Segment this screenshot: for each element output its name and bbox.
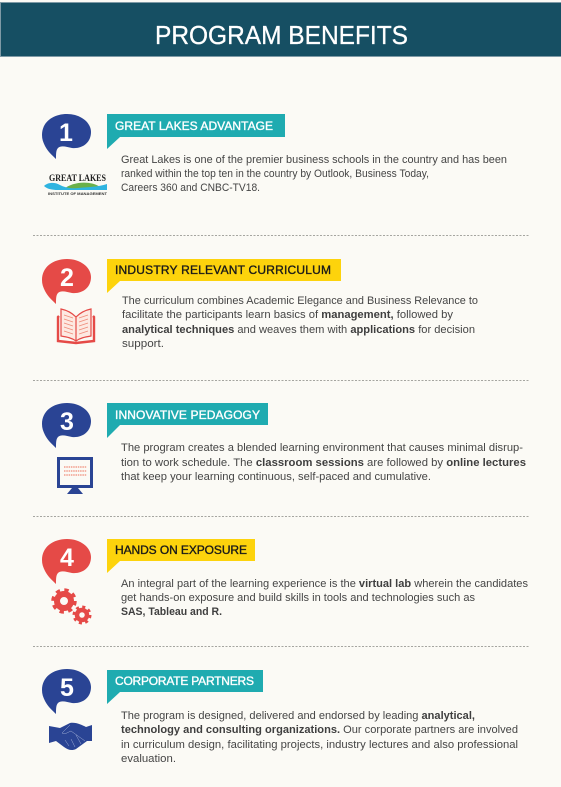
- icon: great lakes logo: GREAT LAKES: [49, 173, 106, 183]
- number bubble 3: [42, 403, 91, 448]
- icon: monitor: [58, 458, 92, 494]
- text block: SAS, Tableau and R.: [121, 606, 222, 618]
- text block: [121, 442, 526, 483]
- heading banner: [107, 403, 268, 438]
- title: PROGRAM BENEFITS: [155, 20, 408, 50]
- text block: facilitate the participants learn basics of management, followed by: [122, 309, 454, 321]
- heading banner: [107, 114, 285, 149]
- heading banner: [107, 539, 255, 573]
- text block: evaluation.: [121, 753, 176, 765]
- number bubble 5: 5: [60, 674, 74, 702]
- text block: in curriculum design, facilitating projects, industry lectures and also professional: [121, 739, 518, 751]
- number bubble 1: 1: [59, 119, 73, 147]
- header band: [0, 2, 561, 57]
- text block: [121, 578, 529, 618]
- text block: An integral part of the learning experience is the virtual lab wherein the candidates: [121, 578, 529, 590]
- text block: analytical techniques and weaves them with applications for decision: [122, 324, 475, 336]
- number bubble 3: 3: [60, 408, 74, 436]
- panel: great lakes advantage: [42, 114, 507, 196]
- heading banner: HANDS ON EXPOSURE: [115, 543, 247, 557]
- number bubble 5: [42, 669, 91, 714]
- icon: open book: [58, 309, 94, 343]
- text block: technology and consulting organizations. Our corporate partners are involved: [121, 724, 518, 736]
- number bubble 2: [42, 259, 91, 304]
- icon: handshake: [49, 723, 92, 750]
- text block: [122, 295, 478, 350]
- heading banner: GREAT LAKES ADVANTAGE: [115, 119, 273, 133]
- text block: ranked within the top ten in the country by Outlook, Business Today,: [121, 168, 429, 180]
- icon: great lakes logo: [44, 173, 108, 196]
- icon: great lakes logo: INSTITUTE OF MANAGEMENT: [48, 192, 108, 196]
- text block: Great Lakes is one of the premier business schools in the country and has been: [121, 154, 507, 166]
- text block: [121, 710, 518, 765]
- text block: [121, 154, 507, 194]
- heading banner: [107, 670, 263, 704]
- text block: The program is designed, delivered and endorsed by leading analytical,: [121, 710, 475, 722]
- text block: support.: [122, 338, 164, 350]
- number bubble 1: [42, 114, 91, 159]
- panel: industry relevant curriculum: [42, 259, 478, 350]
- text block: The program creates a blended learning environment that causes minimal disrup-: [121, 442, 523, 454]
- heading banner: INDUSTRY RELEVANT CURRICULUM: [115, 263, 331, 277]
- heading banner: CORPORATE PARTNERS: [115, 674, 254, 688]
- text block: Careers 360 and CNBC-TV18.: [121, 182, 260, 194]
- number bubble 4: [42, 539, 91, 584]
- text block: get hands-on exposure and build skills in tools and technologies such as: [121, 592, 475, 604]
- number bubble 4: 4: [60, 544, 74, 572]
- text block: The curriculum combines Academic Elegance and Business Relevance to: [122, 295, 478, 307]
- panel: corporate partners: [42, 669, 518, 765]
- icon: gears: [53, 590, 90, 623]
- panel: innovative pedagogy: [42, 403, 526, 494]
- text block: tion to work schedule. The classroom sessions are followed by online lectures: [121, 457, 526, 469]
- number bubble 2: 2: [60, 264, 74, 292]
- heading banner: INNOVATIVE PEDAGOGY: [115, 408, 260, 422]
- heading banner: [107, 259, 341, 293]
- panel: hands on exposure: [42, 539, 529, 623]
- text block: that keep your learning continuous, self-paced and cumulative.: [121, 471, 431, 483]
